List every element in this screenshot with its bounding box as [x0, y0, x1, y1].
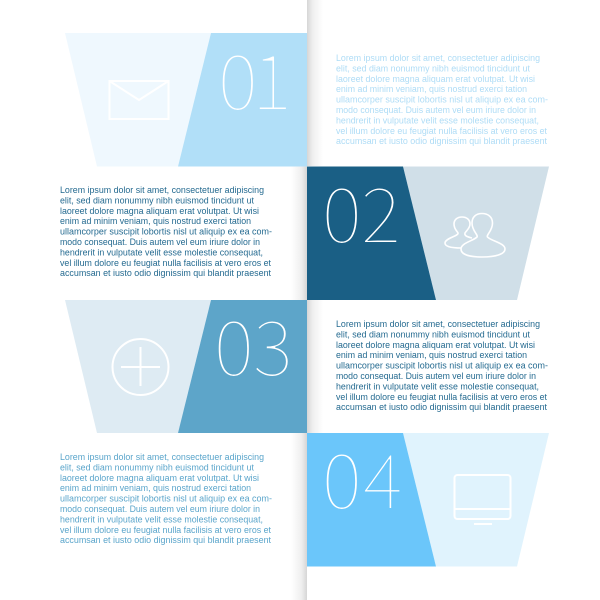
panel 02 number block	[307, 166, 436, 300]
text block: left column 1: hendrerit in vulputate velit esse molestie consequat,	[60, 247, 263, 257]
text block: left column 2: Lorem ipsum dolor sit amet, consectetuer adipiscing	[60, 452, 264, 462]
panel 02 light background	[403, 166, 549, 300]
icon: plus in circle	[112, 339, 168, 395]
text block: right column 1: accumsan et iusto odio dignissim qui blandit praesent	[336, 136, 547, 146]
panel: step 03	[65, 288, 307, 433]
text block: left column 2: hendrerit in vulputate velit esse molestie consequat,	[60, 514, 263, 524]
panel: step 01	[65, 22, 307, 166]
text block: right column 1: laoreet dolore magna aliquam erat volutpat. Ut wisi	[336, 74, 535, 84]
icon: envelope	[110, 81, 168, 119]
text block: right column 1: modo consequat. Duis autem vel eum iriure dolor in	[336, 105, 536, 115]
text block: right column 2: ullamcorper suscipit lobortis nisl ut aliquip ex ea com-	[336, 361, 548, 371]
panel 03 light background	[65, 300, 211, 433]
text block: right column 2: vel illum dolore eu feugiat nulla facilisis at vero eros et	[336, 392, 547, 402]
icon: monitor	[454, 475, 510, 524]
text block: left column 2: laoreet dolore magna aliquam erat volutpat. Ut wisi	[60, 473, 259, 483]
text block: right column 2: enim ad minim veniam, quis nostrud exerci tation	[336, 350, 527, 360]
text block: right column 2: laoreet dolore magna aliquam erat volutpat. Ut wisi	[336, 340, 535, 350]
text block: left column 2	[60, 452, 272, 545]
panel 01 number block	[178, 33, 307, 166]
text block: left column 2: elit, sed diam nonummy nibh euismod tincidunt ut	[60, 462, 254, 472]
number 02: 2	[361, 154, 401, 264]
panel 04 number block	[307, 433, 436, 566]
number 02: 0	[322, 154, 362, 264]
text block: right column 1: elit, sed diam nonummy nibh euismod tincidunt ut	[336, 63, 530, 73]
text block: right column 1	[336, 53, 548, 146]
text block: left column 2: enim ad minim veniam, quis nostrud exerci tation	[60, 483, 251, 493]
text block: left column 1: modo consequat. Duis autem vel eum iriure dolor in	[60, 237, 260, 247]
text block: left column 2: ullamcorper suscipit lobortis nisl ut aliquip ex ea com-	[60, 494, 272, 504]
number 04: 0	[322, 420, 362, 530]
panel 03 number block	[178, 300, 307, 433]
number 04	[322, 420, 403, 530]
text block: left column 1: enim ad minim veniam, quis nostrud exerci tation	[60, 216, 251, 226]
text block: left column 1: ullamcorper suscipit lobortis nisl ut aliquip ex ea com-	[60, 227, 272, 237]
panel: step 04	[307, 420, 549, 566]
number 01: 1	[252, 22, 292, 132]
number 04: 4	[363, 420, 403, 530]
text block: left column 2: accumsan et iusto odio dignissim qui blandit praesent	[60, 535, 271, 545]
text block: right column 2: Lorem ipsum dolor sit amet, consectetuer adipiscing	[336, 319, 540, 329]
number 03: 3	[253, 288, 293, 398]
text block: left column 1: laoreet dolore magna aliquam erat volutpat. Ut wisi	[60, 206, 259, 216]
number 01	[218, 22, 292, 132]
text block: left column 1: accumsan et iusto odio dignissim qui blandit praesent	[60, 268, 271, 278]
number 01: 0	[218, 22, 258, 132]
text block: right column 2	[336, 319, 548, 412]
panel 04 light background	[403, 433, 549, 566]
text block: right column 2: hendrerit in vulputate velit esse molestie consequat,	[336, 381, 539, 391]
number 03: 0	[214, 288, 254, 398]
number 02	[322, 154, 401, 264]
text block: left column 1: vel illum dolore eu feugiat nulla facilisis at vero eros et	[60, 258, 271, 268]
text block: left column 1	[60, 185, 272, 278]
text block: left column 2: modo consequat. Duis autem vel eum iriure dolor in	[60, 504, 260, 514]
text block: right column 1: hendrerit in vulputate velit esse molestie consequat,	[336, 115, 539, 125]
text block: left column 1: Lorem ipsum dolor sit amet, consectetuer adipiscing	[60, 185, 264, 195]
panel 01 light background	[65, 33, 211, 166]
text block: right column 1: Lorem ipsum dolor sit amet, consectetuer adipiscing	[336, 53, 540, 63]
text block: right column 1: ullamcorper suscipit lobortis nisl ut aliquip ex ea com-	[336, 95, 548, 105]
text block: right column 1: vel illum dolore eu feugiat nulla facilisis at vero eros et	[336, 126, 547, 136]
icon: people	[445, 214, 505, 257]
text block: left column 2: vel illum dolore eu feugiat nulla facilisis at vero eros et	[60, 525, 271, 535]
text block: right column 2: accumsan et iusto odio dignissim qui blandit praesent	[336, 402, 547, 412]
text block: right column 2: elit, sed diam nonummy nibh euismod tincidunt ut	[336, 329, 530, 339]
text block: left column 1: elit, sed diam nonummy nibh euismod tincidunt ut	[60, 195, 254, 205]
text block: right column 2: modo consequat. Duis autem vel eum iriure dolor in	[336, 371, 536, 381]
number 03	[214, 288, 293, 398]
panel: step 02	[307, 154, 549, 300]
text block: right column 1: enim ad minim veniam, quis nostrud exerci tation	[336, 84, 527, 94]
